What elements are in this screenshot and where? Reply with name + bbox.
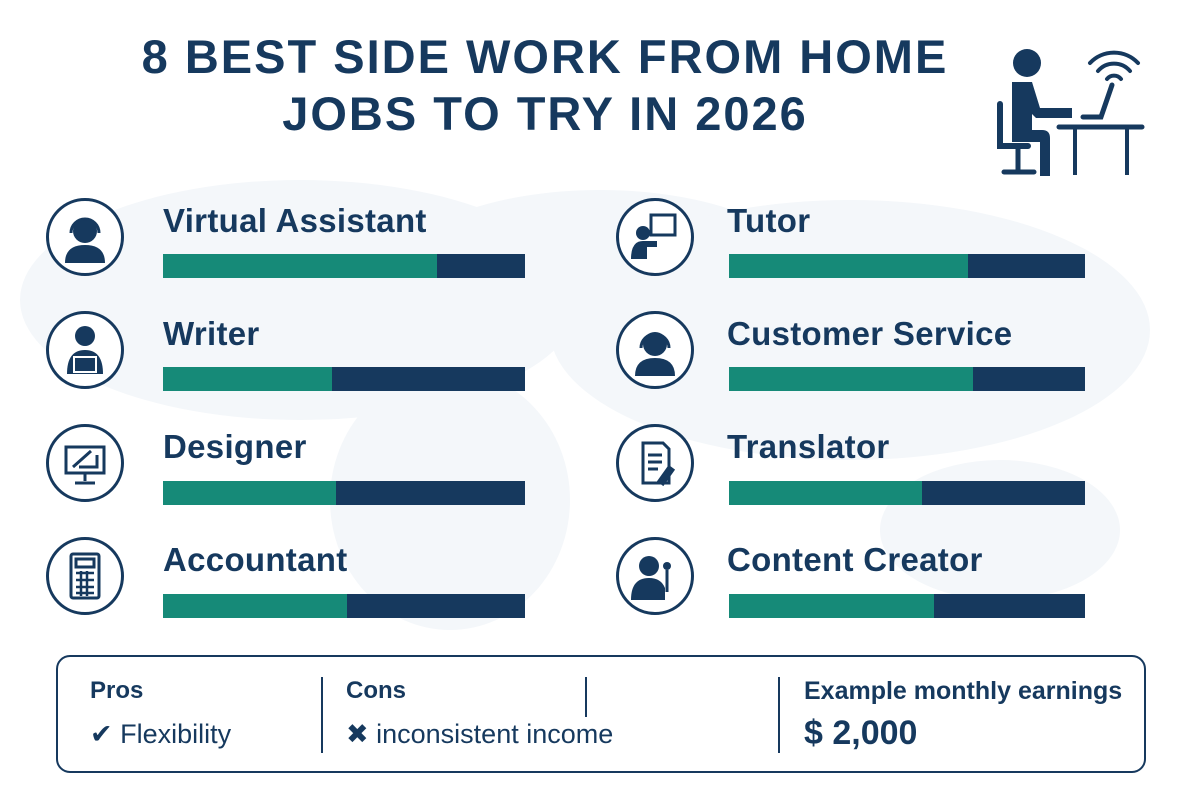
pros [90, 677, 231, 749]
icon: document [616, 424, 694, 502]
icon: headset [616, 311, 694, 389]
item: Writer [46, 311, 525, 391]
label: Accountant [163, 541, 348, 578]
label: Translator [727, 428, 890, 465]
cons: ✖ inconsistent income [346, 719, 613, 749]
bar [729, 367, 1085, 391]
earnings: $ 2,000 [804, 714, 917, 752]
icon: creator with mic [616, 537, 694, 615]
cons: Cons [346, 677, 406, 704]
bar [729, 481, 1085, 505]
item: Content Creator [616, 537, 1085, 618]
earnings [804, 677, 1122, 752]
cons [346, 677, 613, 749]
icon: headset [46, 198, 124, 276]
bar [163, 594, 525, 618]
label: Virtual Assistant [163, 202, 427, 239]
panel: pros/cons/earnings [56, 655, 1146, 773]
bar [729, 254, 1085, 278]
label: Customer Service [727, 315, 1012, 352]
bar [163, 481, 525, 505]
label: Writer [163, 315, 260, 352]
bar [163, 367, 525, 391]
item: Translator [616, 424, 1085, 505]
icon: person at desk with wifi [997, 49, 1144, 176]
label: Content Creator [727, 541, 983, 578]
label: Designer [163, 428, 307, 465]
title: JOBS TO TRY IN 2026 [282, 87, 808, 140]
item: Tutor [616, 198, 1085, 278]
icon: calculator [46, 537, 124, 615]
earnings: Example monthly earnings [804, 677, 1122, 705]
icon: monitor [46, 424, 124, 502]
label: Tutor [727, 202, 810, 239]
icon: tutor board [616, 198, 694, 276]
title [142, 30, 948, 140]
icon: laptop user [46, 311, 124, 389]
background map [20, 180, 1150, 630]
title: 8 BEST SIDE WORK FROM HOME [142, 30, 948, 83]
item: Virtual Assistant [46, 198, 525, 278]
pros: Pros [90, 677, 143, 704]
bar [163, 254, 525, 278]
item: Designer [46, 424, 525, 505]
item: Accountant [46, 537, 525, 618]
bar [729, 594, 1085, 618]
item: Customer Service [616, 311, 1085, 391]
pros: ✔ Flexibility [90, 719, 231, 749]
